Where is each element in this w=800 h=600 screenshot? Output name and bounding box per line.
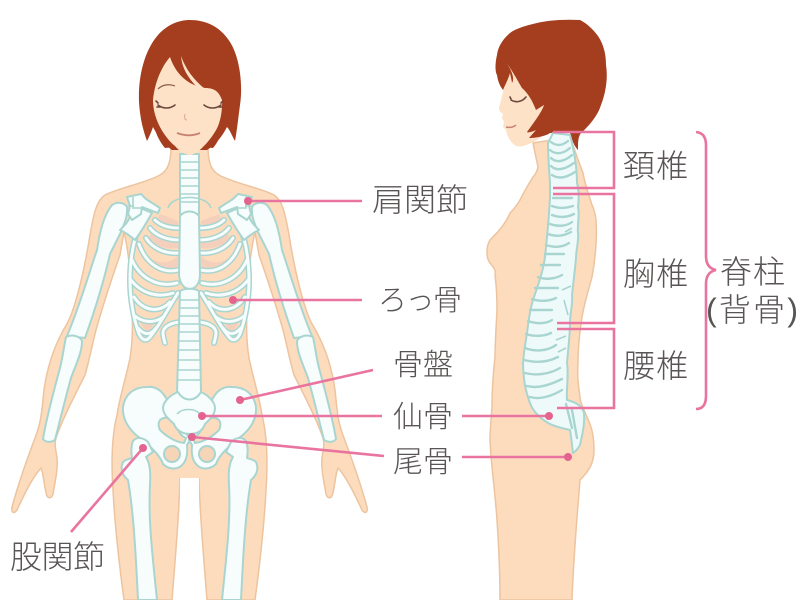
cervical spine front [180, 154, 199, 214]
label: shoulder joint: 肩関節 [372, 182, 468, 218]
leader: sacrum [198, 412, 382, 420]
front figure [12, 140, 367, 600]
side mouth [506, 125, 516, 127]
label: sacrum: 仙骨 [393, 401, 453, 434]
bracket: lumbar [557, 329, 614, 408]
label: pelvis: 骨盤 [393, 349, 453, 382]
lumbar spine [177, 289, 201, 400]
label: backbone: (背骨) [706, 292, 798, 328]
sternum [179, 212, 200, 289]
eyes and brows [156, 85, 223, 108]
nose [185, 114, 187, 120]
bracket: cervical [553, 132, 614, 188]
side eye [510, 97, 526, 102]
hair highlight [181, 56, 205, 89]
leader: coccyx side [462, 453, 572, 461]
leader: coccyx [188, 433, 384, 456]
front skeleton bones [43, 154, 336, 600]
label: spine: 脊柱 [720, 254, 785, 290]
leader lines and dots, front [71, 197, 384, 532]
front body silhouette [12, 140, 367, 600]
leader: ribs [229, 296, 362, 304]
sacrum [163, 392, 215, 434]
label: lumbar: 腰椎 [623, 348, 688, 384]
side face [499, 60, 560, 147]
label: hip joint: 股関節 [10, 539, 105, 575]
cheek hair right [203, 116, 223, 148]
mouth [177, 133, 200, 135]
sacrum arc [177, 410, 200, 414]
bracket: thoracic [553, 194, 614, 323]
leader: shoulder joint [244, 197, 362, 205]
side figure [487, 20, 607, 600]
side hair [496, 20, 607, 150]
front face [153, 57, 222, 155]
front head [139, 20, 241, 155]
brace: spine [696, 132, 716, 409]
leader: hip joint [71, 444, 147, 532]
collar arcs [168, 198, 211, 208]
label: thoracic: 胸椎 [623, 256, 688, 292]
leader: pelvis [236, 370, 373, 404]
side spine [523, 133, 584, 453]
cheek hair left [153, 116, 175, 148]
leader lines and brackets, side [462, 132, 716, 461]
front hair [139, 20, 241, 150]
label: coccyx: 尾骨 [393, 446, 453, 479]
label: cervical: 頚椎 [623, 148, 688, 184]
label: ribs: ろっ骨 [378, 285, 462, 317]
leader: sacrum side [462, 412, 553, 420]
side body silhouette [487, 137, 596, 600]
